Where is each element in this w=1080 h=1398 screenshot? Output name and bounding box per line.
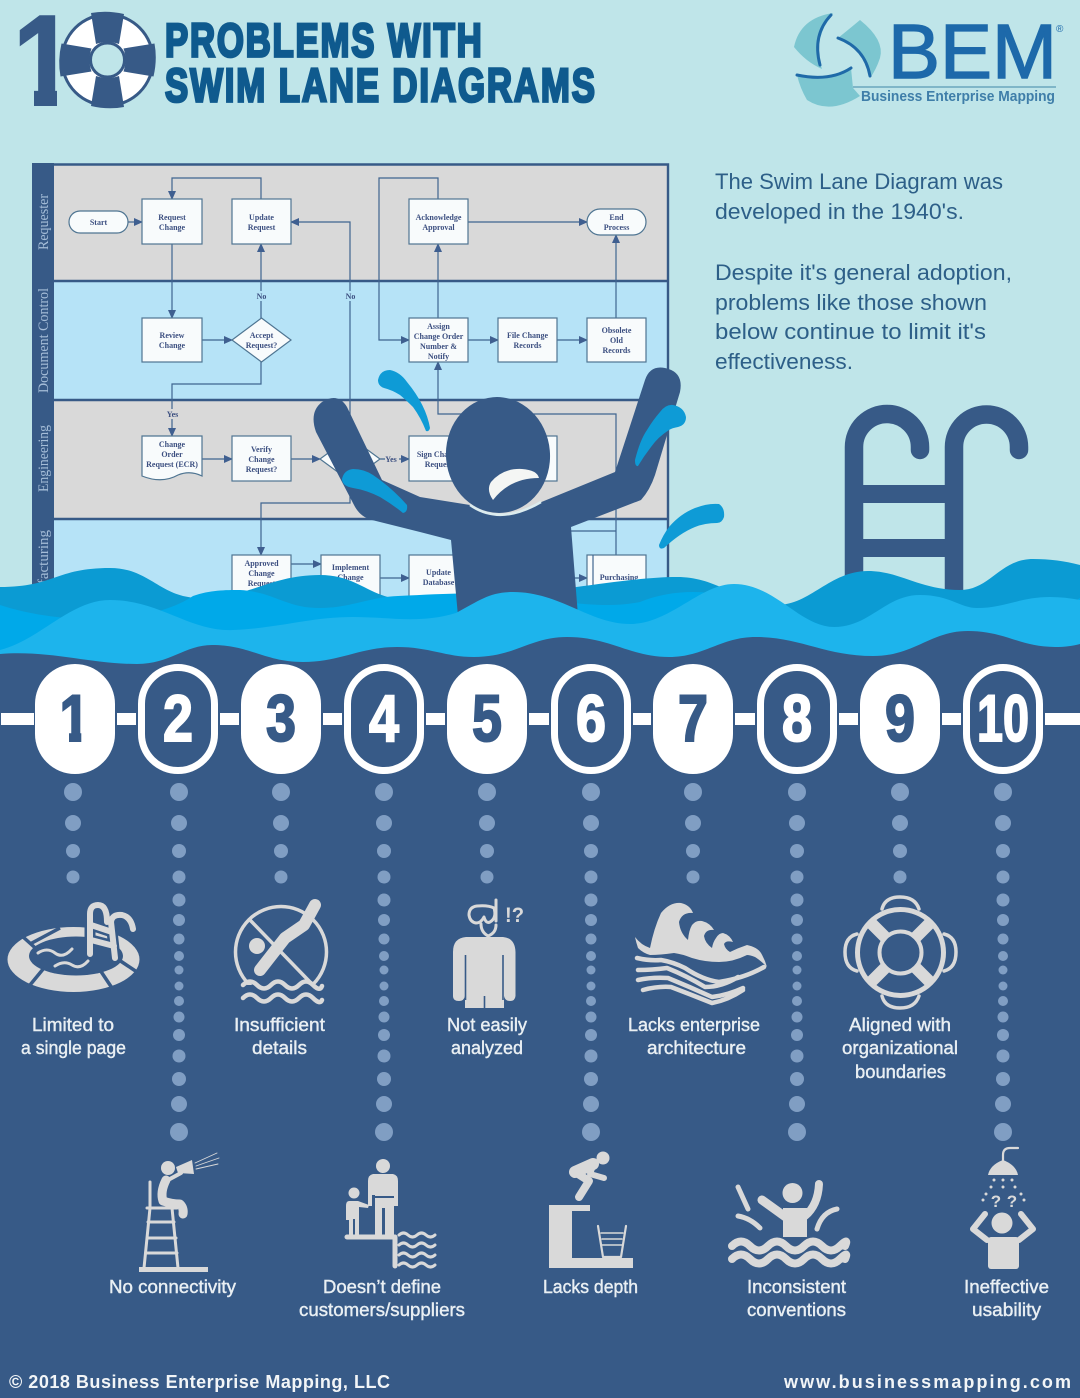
label: aligned with organizational boundaries: Aligned with bbox=[849, 1015, 951, 1035]
swim lane diagram: Purchasing bbox=[600, 573, 638, 582]
label: inconsistent conventions bbox=[747, 1277, 846, 1320]
icon: no diving bbox=[228, 905, 334, 1010]
swim lane diagram: Update bbox=[426, 568, 451, 577]
footer: © 2018 Business Enterprise Mapping, LLC bbox=[9, 1372, 390, 1392]
mouth bbox=[489, 469, 539, 500]
title numeral and life ring bbox=[8, 0, 156, 133]
swim lane diagram: Old bbox=[610, 336, 623, 345]
pill 1: 1 bbox=[60, 681, 90, 755]
intro text: developed in the 1940's. bbox=[715, 199, 964, 224]
pill 6: 6 bbox=[576, 681, 606, 755]
pill 8 bbox=[760, 668, 834, 770]
swim lane diagram: Change bbox=[337, 573, 364, 582]
icon: life ring bbox=[845, 897, 956, 1008]
swim lane diagram: Records bbox=[602, 346, 630, 355]
pill 9 bbox=[860, 664, 940, 774]
swim lane diagram: Change bbox=[159, 223, 186, 232]
front water waves bbox=[0, 584, 1080, 700]
swim lane diagram bbox=[32, 163, 668, 649]
swim lane diagram: Update bbox=[249, 213, 274, 222]
title: SWIM LANE DIAGRAMS bbox=[165, 59, 595, 112]
label: ineffective usability bbox=[964, 1277, 1049, 1320]
label: doesn't define customers/suppliers: customers/suppliers bbox=[299, 1300, 465, 1320]
pill 8: 8 bbox=[782, 681, 812, 755]
dotted lines: short columns bbox=[64, 783, 909, 884]
pill 2: 2 bbox=[163, 681, 193, 755]
swim lane diagram: Obsolete bbox=[602, 326, 632, 335]
pill 3: 3 bbox=[266, 681, 296, 755]
swim lane diagram: Request (ECR) bbox=[146, 460, 198, 469]
swim lane diagram: Verify bbox=[251, 445, 272, 454]
dotted lines: long columns bbox=[170, 783, 1012, 1141]
swim lane diagram: Assign bbox=[427, 322, 450, 331]
label: not easily analyzed: analyzed bbox=[451, 1038, 523, 1058]
swim lane diagram: Request bbox=[248, 579, 276, 588]
back water waves bbox=[0, 559, 1080, 700]
pill 10: 10 bbox=[977, 681, 1029, 755]
swim lane diagram: Request bbox=[425, 460, 453, 469]
intro text: Despite it's general adoption, bbox=[715, 260, 1012, 285]
swim lane diagram: No bbox=[257, 292, 266, 301]
swim lane diagram: Accept bbox=[250, 331, 274, 340]
intro text: effectiveness. bbox=[715, 349, 853, 374]
swim lane diagram: Approval bbox=[422, 223, 455, 232]
BEM logo bbox=[794, 9, 1064, 107]
swim lane diagram: Process bbox=[604, 223, 629, 232]
icon: pool with ladder bbox=[8, 905, 140, 992]
swim lane diagram: Database bbox=[423, 578, 455, 587]
swim lane diagram: Number & bbox=[420, 342, 457, 351]
label: lacks enterprise architecture: architecture bbox=[647, 1038, 746, 1058]
label: no connectivity: No connectivity bbox=[109, 1277, 236, 1297]
swim lane diagram: File Change bbox=[507, 331, 549, 340]
swim lane diagram: Change bbox=[159, 440, 186, 449]
icon: confused person under shower: ? bbox=[991, 1192, 1001, 1211]
label: inconsistent conventions: conventions bbox=[747, 1300, 846, 1320]
label: limited to a single page: Limited to bbox=[32, 1015, 114, 1035]
swim lane diagram: Change bbox=[248, 455, 275, 464]
label: limited to a single page bbox=[21, 1015, 126, 1058]
swim lane diagram: Change bbox=[248, 569, 275, 578]
swim lane diagram: Order bbox=[161, 450, 183, 459]
label: aligned with organizational boundaries: organizational bbox=[842, 1038, 958, 1058]
swim lane diagram: Document Control bbox=[36, 288, 52, 393]
icon: diver jumping into a glass bbox=[549, 1152, 633, 1268]
label: insufficient details: details bbox=[252, 1038, 307, 1058]
swim lane diagram: Change bbox=[159, 341, 186, 350]
icon: lifeguard with megaphone bbox=[139, 1153, 219, 1272]
swim lane diagram: Change Order bbox=[414, 332, 464, 341]
swim lane diagram: Requester bbox=[36, 194, 52, 250]
label: inconsistent conventions: Inconsistent bbox=[747, 1277, 846, 1297]
label: doesn't define customers/suppliers bbox=[299, 1277, 465, 1320]
title: PROBLEMS WITH bbox=[165, 14, 482, 67]
pill 2 bbox=[142, 668, 214, 770]
navy lower panel bbox=[0, 631, 1080, 1398]
swim lane diagram: Records bbox=[514, 341, 542, 350]
intro text bbox=[715, 169, 1012, 374]
icon: adult and child on pool step bbox=[346, 1159, 435, 1267]
icon: confused person under shower: ? bbox=[1007, 1192, 1017, 1211]
label: insufficient details: Insufficient bbox=[234, 1015, 325, 1035]
pill 4 bbox=[348, 668, 420, 770]
label: not easily analyzed: Not easily bbox=[447, 1015, 527, 1035]
label: limited to a single page: a single page bbox=[21, 1038, 126, 1058]
footer bbox=[9, 1372, 1071, 1392]
label: aligned with organizational boundaries bbox=[842, 1015, 958, 1082]
swim lane diagram: Start bbox=[90, 218, 108, 227]
icon: confused snorkeler bbox=[453, 900, 524, 1009]
label: ineffective usability: usability bbox=[972, 1300, 1041, 1320]
label: insufficient details bbox=[234, 1015, 325, 1058]
swim lane diagram: Request bbox=[158, 213, 186, 222]
intro text: The Swim Lane Diagram was bbox=[715, 169, 1003, 194]
swim lane diagram: No bbox=[346, 292, 355, 301]
swim lane diagram: End bbox=[609, 213, 624, 222]
label: aligned with organizational boundaries: boundaries bbox=[855, 1062, 946, 1082]
icon: confused snorkeler: !? bbox=[505, 904, 524, 927]
pill 5: 5 bbox=[472, 681, 502, 755]
label: doesn't define customers/suppliers: Doesn’t define bbox=[323, 1277, 441, 1297]
pill 7: 7 bbox=[678, 681, 708, 755]
intro text: problems like those shown bbox=[715, 290, 987, 315]
swim lane diagram: Yes bbox=[167, 410, 178, 419]
label: lacks depth: Lacks depth bbox=[543, 1277, 638, 1297]
label: lacks enterprise architecture bbox=[628, 1015, 760, 1058]
swim lane diagram: Request? bbox=[246, 341, 277, 350]
swim lane diagram: Request? bbox=[246, 465, 277, 474]
pill 10 bbox=[966, 668, 1040, 770]
pill 3 bbox=[241, 664, 321, 774]
water splashes bbox=[342, 370, 724, 549]
icon: pool ladder bbox=[854, 414, 1019, 600]
number pills bbox=[35, 664, 1040, 774]
swim lane diagram: Notify bbox=[428, 352, 449, 361]
icon: person splashing bbox=[732, 1183, 846, 1264]
swim lane diagram: Review bbox=[160, 331, 185, 340]
pill 9: 9 bbox=[885, 681, 915, 755]
connector bar bbox=[1, 713, 1080, 725]
title bbox=[165, 14, 595, 112]
pill 5 bbox=[447, 664, 527, 774]
swim lane diagram: Implement bbox=[332, 563, 370, 572]
BEM logo: ® bbox=[1056, 24, 1064, 35]
swim lane diagram: Approved bbox=[244, 559, 279, 568]
swim lane diagram: Request bbox=[248, 223, 276, 232]
icon: confused person under shower bbox=[973, 1148, 1033, 1269]
intro text: below continue to limit it's bbox=[715, 319, 986, 344]
label: lacks enterprise architecture: Lacks enterprise bbox=[628, 1015, 760, 1035]
pill 1 bbox=[35, 664, 115, 774]
icon: waves bbox=[635, 903, 767, 1003]
swim lane diagram: Manufacturing bbox=[36, 530, 52, 619]
pill 7 bbox=[653, 664, 733, 774]
footer: www.businessmapping.com bbox=[783, 1372, 1071, 1392]
pill 4: 4 bbox=[369, 681, 399, 755]
label: ineffective usability: Ineffective bbox=[964, 1277, 1049, 1297]
pill 6 bbox=[554, 668, 628, 770]
swim lane diagram: Acknowledge bbox=[416, 213, 462, 222]
BEM logo: BEM bbox=[888, 9, 1057, 95]
swim lane diagram: Engineering bbox=[36, 425, 52, 492]
drowning figure bbox=[314, 368, 724, 616]
BEM logo: Business Enterprise Mapping bbox=[861, 89, 1055, 105]
swim lane diagram: Sign Change bbox=[417, 450, 461, 459]
swim lane diagram: Yes bbox=[385, 455, 397, 464]
label: not easily analyzed bbox=[447, 1015, 527, 1058]
